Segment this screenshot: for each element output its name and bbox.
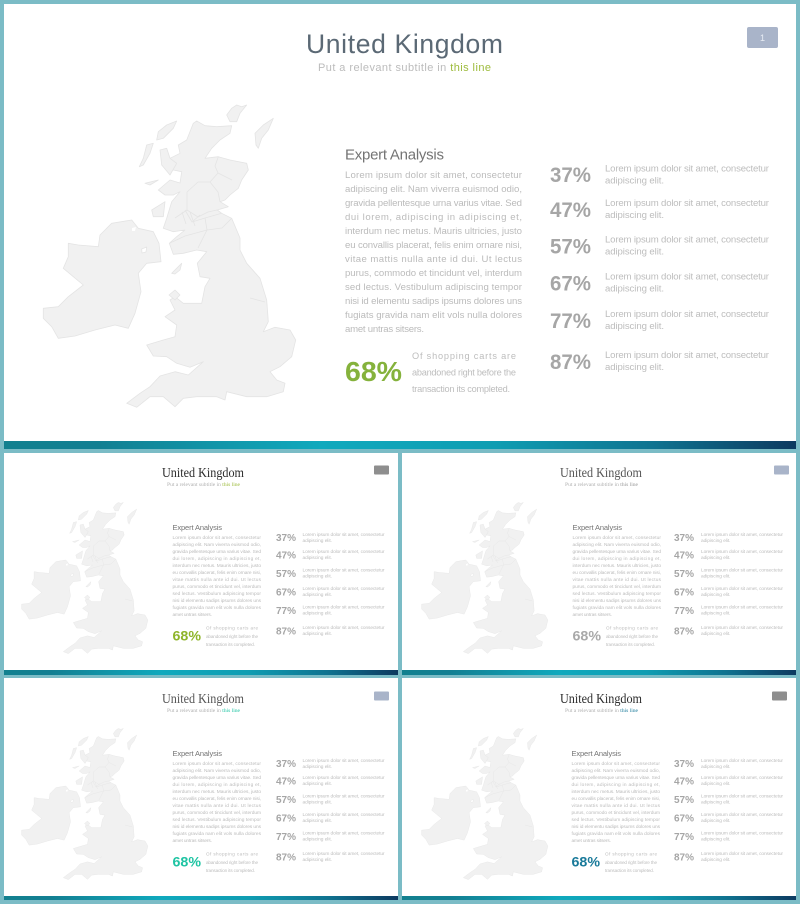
body paragraph: sed lectus. Vestibulum adipiscing tempor — [172, 591, 261, 597]
heading: Expert Analysis — [572, 523, 622, 532]
stat list: 47% — [674, 776, 695, 788]
body paragraph: eu convallis placerat, felis enim ornare nisi, — [345, 240, 522, 251]
callout: 68%: transaction its completed. — [206, 868, 255, 873]
stat list: Lorem ipsum dolor sit amet, consectetur — [701, 586, 783, 592]
body paragraph — [345, 170, 523, 335]
title: United Kingdom — [560, 465, 642, 480]
stat list: adipiscing elit. — [605, 176, 664, 186]
stat list: adipiscing elit. — [701, 573, 730, 579]
body paragraph: eu convallis placerat, felis enim ornare nisi, — [572, 796, 660, 802]
stat list: adipiscing elit. — [701, 764, 730, 770]
callout: 68%: transaction its completed. — [605, 868, 654, 873]
page number badge — [374, 692, 389, 700]
slide content — [422, 465, 789, 654]
stat list — [276, 532, 385, 638]
body paragraph: interdum nec metus. Mauris ultricies, justo — [172, 563, 261, 569]
callout: 68%: 68% — [572, 628, 602, 644]
body paragraph: vitae mattis nulla ante id dui. Ut lectus — [172, 577, 262, 583]
stat list: adipiscing elit. — [701, 818, 730, 824]
stat list: 47% — [550, 199, 591, 222]
stat list: adipiscing elit. — [701, 857, 730, 863]
subtitle: Put a relevant subtitle in this line — [167, 708, 241, 714]
callout: 68%: Of shopping carts are — [206, 852, 258, 856]
stat list: adipiscing elit. — [302, 799, 332, 805]
body paragraph: nisi id elementu sadips ipsums dolores uns — [345, 296, 522, 307]
stat list: Lorem ipsum dolor sit amet, consectetur — [302, 812, 385, 818]
body paragraph: vitae mattis nulla ante id dui. Ut lectus — [572, 577, 662, 583]
stat list — [550, 164, 770, 374]
body paragraph — [572, 761, 661, 844]
stat list: 67% — [674, 586, 695, 598]
stat list: Lorem ipsum dolor sit amet, consectetur — [701, 812, 783, 818]
slide content — [422, 691, 787, 880]
body paragraph: fugiats gravida nam elit vols nulla dolores — [572, 605, 662, 611]
map: United Kingdom and Ireland — [43, 105, 296, 407]
stat list: Lorem ipsum dolor sit amet, consectetur — [302, 532, 385, 538]
title: United Kingdom — [560, 691, 642, 706]
body paragraph: adipiscing elit. Nam viverra euismod odio, — [572, 542, 661, 548]
title: United Kingdom — [306, 29, 503, 59]
body paragraph: gravida pellentesque urna varius vitae. Sed — [172, 775, 261, 781]
page number badge — [772, 692, 787, 700]
callout: 68%: Of shopping carts are — [206, 626, 258, 630]
stat list: Lorem ipsum dolor sit amet, consectetur — [701, 758, 783, 764]
stat list: 47% — [276, 776, 297, 788]
stat list: Lorem ipsum dolor sit amet, consectetur — [605, 198, 770, 209]
body paragraph: dui lorem, adipiscing in adipiscing et, — [572, 782, 660, 788]
body paragraph: purus, commodo et tincidunt vel, interdum — [172, 810, 261, 816]
subtitle: Put a relevant subtitle in this line — [318, 62, 491, 74]
stat list: 67% — [276, 812, 297, 824]
stat list: Lorem ipsum dolor sit amet, consectetur — [701, 604, 783, 610]
body paragraph: eu convallis placerat, felis enim ornare nisi, — [172, 570, 261, 576]
body paragraph: Lorem ipsum dolor sit amet, consectetur — [572, 761, 660, 767]
body paragraph: amet untras sitsers. — [572, 612, 612, 618]
stat list: adipiscing elit. — [605, 246, 664, 258]
map — [422, 728, 548, 880]
stat list: adipiscing elit. — [302, 857, 332, 863]
body paragraph: dui lorem, adipiscing in adipiscing et, — [172, 556, 261, 562]
map — [22, 502, 148, 654]
callout: 68% — [572, 852, 657, 873]
stat list: adipiscing elit. — [302, 818, 332, 824]
body paragraph: vitae mattis nulla ante id dui. Ut lectus — [572, 803, 661, 809]
map — [22, 728, 148, 880]
callout: 68%: abandoned right before the — [206, 634, 258, 639]
body paragraph: vitae mattis nulla ante id dui. Ut lectus — [345, 254, 522, 265]
stat list: 87% — [276, 626, 297, 638]
callout: 68%: Of shopping carts are — [605, 852, 657, 856]
stat list: Lorem ipsum dolor sit amet, consectetur — [302, 830, 385, 836]
body paragraph: amet untras sitsers. — [172, 838, 212, 844]
body paragraph: Lorem ipsum dolor sit amet, consectetur — [345, 170, 523, 181]
body paragraph: fugiats gravida nam elit vols nulla dolores — [172, 605, 262, 611]
callout: 68% — [172, 852, 258, 873]
stat list: adipiscing elit. — [701, 592, 730, 598]
heading: Expert Analysis — [572, 749, 621, 758]
body paragraph: nisi id elementu sadips ipsums dolores uns — [172, 598, 262, 604]
stat list: adipiscing elit. — [302, 592, 332, 598]
stat list: 37% — [276, 532, 297, 544]
callout: 68%: abandoned right before the — [606, 634, 658, 639]
stat list: 47% — [674, 550, 695, 562]
stat list: Lorem ipsum dolor sit amet, consectetur — [302, 549, 385, 555]
stat list: 77% — [276, 605, 297, 617]
page number badge: 1 — [760, 33, 765, 43]
stat list: Lorem ipsum dolor sit amet, consectetur — [701, 532, 783, 538]
body paragraph: fugiats gravida nam elit vols nulla dolores — [172, 831, 262, 837]
callout: 68%: abandoned right before the — [412, 368, 516, 378]
stat list: Lorem ipsum dolor sit amet, consectetur — [605, 234, 770, 246]
stat list: adipiscing elit. — [302, 781, 332, 787]
body paragraph: nisi id elementu sadips ipsums dolores uns — [572, 824, 661, 830]
stat list: adipiscing elit. — [302, 836, 332, 842]
body paragraph — [572, 535, 662, 618]
stat list: 87% — [674, 852, 695, 864]
stat list: Lorem ipsum dolor sit amet, consectetur — [302, 567, 385, 573]
stat list: 37% — [674, 532, 695, 544]
body paragraph: Lorem ipsum dolor sit amet, consectetur — [172, 535, 261, 541]
subtitle: Put a relevant subtitle in this line — [167, 482, 241, 488]
body paragraph: sed lectus. Vestibulum adipiscing tempor — [172, 817, 261, 823]
stat list: adipiscing elit. — [701, 538, 730, 544]
heading: Expert Analysis — [172, 749, 222, 758]
body paragraph: dui lorem, adipiscing in adipiscing et, — [572, 556, 661, 562]
body paragraph: amet untras sitsers. — [572, 838, 611, 844]
stat list: Lorem ipsum dolor sit amet, consectetur — [701, 830, 783, 836]
subtitle: Put a relevant subtitle in this line — [565, 482, 639, 488]
callout: 68%: abandoned right before the — [605, 860, 657, 865]
callout: 68%: Of shopping carts are — [606, 626, 658, 630]
body paragraph: adipiscing elit. Nam viverra euismod odio, — [172, 542, 261, 548]
stat list: 57% — [674, 794, 695, 806]
body paragraph: vitae mattis nulla ante id dui. Ut lectus — [172, 803, 262, 809]
slide content — [22, 465, 389, 654]
stat list: Lorem ipsum dolor sit amet, consectetur — [605, 350, 770, 361]
body paragraph: fugiats gravida nam elit vols nulla dolores — [345, 310, 522, 321]
body paragraph: dui lorem, adipiscing in adipiscing et, — [345, 212, 522, 223]
stat list: Lorem ipsum dolor sit amet, consectetur — [605, 272, 770, 282]
stat list: adipiscing elit. — [302, 610, 332, 616]
stat list: Lorem ipsum dolor sit amet, consectetur — [302, 604, 385, 610]
title: United Kingdom — [162, 691, 244, 706]
body paragraph: purus, commodo et tincidunt vel, interdum — [572, 584, 661, 590]
stat list: 67% — [276, 586, 297, 598]
callout: 68%: 68% — [172, 854, 202, 870]
callout: 68%: 68% — [345, 356, 402, 387]
body paragraph: interdum nec metus. Mauris ultricies, justo — [172, 789, 261, 795]
body paragraph: adipiscing elit. Nam viverra euismod odio, — [345, 184, 522, 195]
stat list: 57% — [276, 794, 297, 806]
stat list: Lorem ipsum dolor sit amet, consectetur — [701, 793, 783, 799]
panel: small slide blue — [402, 678, 796, 900]
footer strip — [4, 670, 398, 675]
stat list: 47% — [276, 550, 297, 562]
stat list: Lorem ipsum dolor sit amet, consectetur — [701, 549, 783, 555]
panel: small slide green — [4, 453, 398, 675]
callout: 68%: Of shopping carts are — [412, 351, 516, 361]
body paragraph: interdum nec metus. Mauris ultricies, justo — [572, 563, 661, 569]
footer strip — [402, 670, 796, 675]
stat list: Lorem ipsum dolor sit amet, consectetur — [605, 164, 770, 174]
stat list: 87% — [276, 852, 297, 864]
page number badge — [774, 466, 789, 474]
body paragraph — [172, 761, 262, 844]
stat list — [674, 758, 783, 864]
stat list: 87% — [550, 351, 591, 374]
stat list: adipiscing elit. — [605, 362, 664, 373]
stat list: Lorem ipsum dolor sit amet, consectetur — [302, 586, 385, 592]
callout: 68% — [172, 626, 258, 647]
stat list: Lorem ipsum dolor sit amet, consectetur — [701, 567, 783, 573]
stat list: Lorem ipsum dolor sit amet, consectetur — [302, 851, 385, 857]
stat list: Lorem ipsum dolor sit amet, consectetur — [302, 758, 385, 764]
body paragraph: purus, commodo et tincidunt vel, interdum — [572, 810, 660, 816]
callout: 68%: abandoned right before the — [206, 860, 258, 865]
panel: small slide grey — [402, 453, 796, 675]
stat list: adipiscing elit. — [701, 610, 730, 616]
callout: 68%: transaction its completed. — [206, 642, 255, 647]
body paragraph — [172, 535, 262, 618]
body paragraph: gravida pellentesque urna varius vitae. Sed — [572, 549, 661, 555]
panel: main slide — [4, 4, 796, 449]
body paragraph: Lorem ipsum dolor sit amet, consectetur — [172, 761, 261, 767]
stat list: Lorem ipsum dolor sit amet, consectetur — [701, 851, 783, 857]
stat list: adipiscing elit. — [701, 631, 730, 637]
stat list: adipiscing elit. — [701, 781, 730, 787]
stat list: 67% — [674, 812, 695, 824]
stat list: Lorem ipsum dolor sit amet, consectetur — [701, 775, 783, 781]
heading: Expert Analysis — [172, 523, 222, 532]
body paragraph: purus, commodo et tincidunt vel, interdum — [345, 268, 522, 279]
stat list: 77% — [276, 831, 297, 843]
stat list: adipiscing elit. — [605, 210, 664, 221]
body paragraph: gravida pellentesque urna varius vitae. Sed — [172, 549, 261, 555]
stat list — [674, 532, 783, 638]
stat list: adipiscing elit. — [302, 555, 332, 561]
page number badge — [374, 466, 389, 474]
body paragraph: amet untras sitsers. — [172, 612, 212, 618]
stat list: adipiscing elit. — [302, 631, 332, 637]
stat list: 87% — [674, 626, 695, 638]
stat list: adipiscing elit. — [701, 836, 730, 842]
stat list: 57% — [674, 568, 695, 580]
body paragraph: adipiscing elit. Nam viverra euismod odio, — [172, 768, 261, 774]
stat list: adipiscing elit. — [605, 284, 664, 294]
stat list: Lorem ipsum dolor sit amet, consectetur — [302, 625, 385, 631]
body paragraph: amet untras sitsers. — [345, 324, 424, 335]
map — [422, 502, 548, 654]
body paragraph: gravida pellentesque urna varius vitae. Sed — [345, 198, 522, 209]
stat list: Lorem ipsum dolor sit amet, consectetur — [701, 625, 783, 631]
panel: small slide teal — [4, 678, 398, 900]
body paragraph: Lorem ipsum dolor sit amet, consectetur — [572, 535, 661, 541]
callout: 68% — [572, 626, 658, 647]
stat list: 77% — [550, 310, 591, 333]
stat list: 77% — [674, 605, 695, 617]
callout: 68%: 68% — [172, 628, 202, 644]
slide content — [22, 691, 389, 880]
body paragraph: gravida pellentesque urna varius vitae. Sed — [572, 775, 660, 781]
stat list: 57% — [550, 236, 591, 258]
body paragraph: eu convallis placerat, felis enim ornare nisi, — [172, 796, 261, 802]
body paragraph: adipiscing elit. Nam viverra euismod odio, — [572, 768, 660, 774]
body paragraph: nisi id elementu sadips ipsums dolores uns — [572, 598, 662, 604]
stat list: 37% — [674, 758, 695, 770]
body paragraph: sed lectus. Vestibulum adipiscing tempor — [345, 282, 523, 293]
callout: 68%: transaction its completed. — [606, 642, 655, 647]
stat list: Lorem ipsum dolor sit amet, consectetur — [302, 793, 385, 799]
stat list: 67% — [550, 272, 591, 296]
stat list — [276, 758, 385, 864]
stat list: adipiscing elit. — [302, 764, 332, 770]
heading: Expert Analysis: Expert Analysis — [345, 146, 444, 164]
stat list: adipiscing elit. — [701, 799, 730, 805]
body paragraph: purus, commodo et tincidunt vel, interdum — [172, 584, 261, 590]
body paragraph: fugiats gravida nam elit vols nulla dolores — [572, 831, 661, 837]
subtitle: Put a relevant subtitle in this line — [565, 708, 639, 714]
stat list: 37% — [550, 164, 591, 187]
footer strip — [402, 896, 796, 900]
stat list: 57% — [276, 568, 297, 580]
title: United Kingdom — [162, 465, 244, 480]
stat list: adipiscing elit. — [605, 321, 664, 332]
stat list: adipiscing elit. — [302, 573, 332, 579]
stat list: adipiscing elit. — [701, 555, 730, 561]
body paragraph: nisi id elementu sadips ipsums dolores uns — [172, 824, 262, 830]
page number badge — [747, 27, 778, 48]
body paragraph: eu convallis placerat, felis enim ornare nisi, — [572, 570, 661, 576]
body paragraph: sed lectus. Vestibulum adipiscing tempor — [572, 817, 660, 823]
body paragraph: sed lectus. Vestibulum adipiscing tempor — [572, 591, 661, 597]
body paragraph: interdum nec metus. Mauris ultricies, justo — [572, 789, 660, 795]
footer strip — [4, 441, 796, 449]
body paragraph: interdum nec metus. Mauris ultricies, justo — [345, 226, 522, 237]
stat list: 77% — [674, 831, 695, 843]
stat list: Lorem ipsum dolor sit amet, consectetur — [302, 775, 385, 781]
footer strip — [4, 896, 398, 900]
callout: 68%: 68% — [572, 854, 601, 870]
stat list: 37% — [276, 758, 297, 770]
body paragraph: dui lorem, adipiscing in adipiscing et, — [172, 782, 261, 788]
stat list: adipiscing elit. — [302, 538, 332, 544]
stat list: Lorem ipsum dolor sit amet, consectetur — [605, 309, 770, 320]
callout: 68% — [345, 351, 516, 394]
callout: 68%: transaction its completed. — [412, 384, 510, 394]
